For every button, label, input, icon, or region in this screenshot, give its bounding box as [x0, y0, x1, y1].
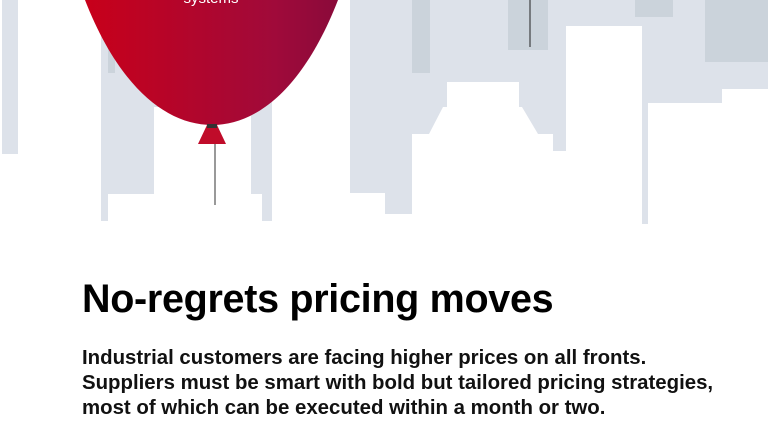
- balloon: [85, 0, 338, 205]
- body text: [82, 347, 713, 419]
- body text: Suppliers must be smart with bold but tailored pricing strategies,: [82, 372, 713, 394]
- title: No-regrets pricing moves: [82, 277, 553, 321]
- body text: Industrial customers are facing higher prices on all fronts.: [82, 347, 646, 369]
- body text: most of which can be executed within a month or two.: [82, 397, 605, 419]
- skyline: [2, 0, 768, 224]
- skyline illustration with balloon: [2, 0, 768, 224]
